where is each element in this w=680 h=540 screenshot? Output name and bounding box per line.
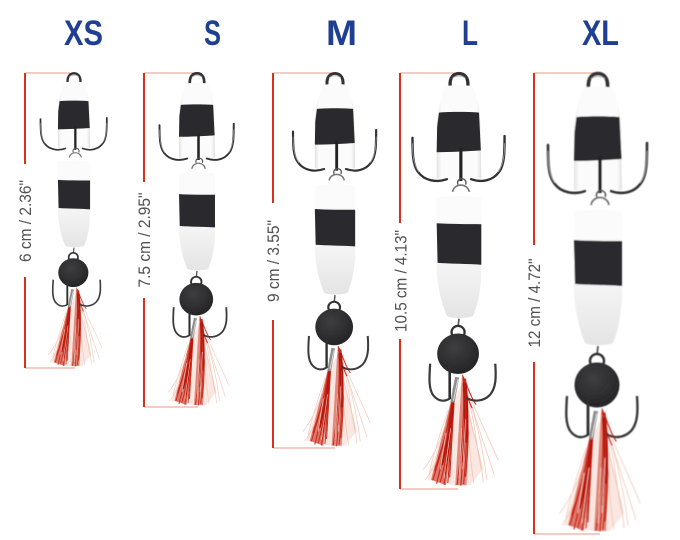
upper float xyxy=(574,86,622,192)
lower float xyxy=(179,172,215,270)
upper treble hook xyxy=(293,130,376,180)
upper float xyxy=(315,84,355,169)
size label: L: L xyxy=(462,14,478,53)
top eyelet xyxy=(68,73,80,83)
ball sinker xyxy=(574,346,620,408)
size label: M: M xyxy=(326,14,357,53)
red feather tail xyxy=(560,409,640,531)
lower float xyxy=(574,210,622,345)
length text XL: 12 cm / 4.72" xyxy=(526,258,544,348)
lure: S xyxy=(160,73,234,405)
upper treble hook xyxy=(160,124,234,169)
lower treble hook xyxy=(308,336,368,371)
length text L: 10.5 cm / 4.13" xyxy=(392,230,410,332)
upper float xyxy=(58,82,90,149)
top eyelet xyxy=(327,73,343,85)
upper treble hook xyxy=(40,118,107,157)
top eyelet xyxy=(588,74,608,88)
lure: L xyxy=(412,73,505,485)
size label: XL: XL xyxy=(582,14,619,53)
dimension: L bracket and length xyxy=(392,73,458,489)
length text M: 9 cm / 3.55" xyxy=(265,220,283,302)
lower float xyxy=(315,184,355,295)
dimension: M bracket and length xyxy=(265,73,335,448)
lower float xyxy=(437,196,481,318)
top eyelet xyxy=(450,73,468,86)
ball sinker xyxy=(58,248,88,287)
lure: M xyxy=(293,73,376,446)
lure: XS xyxy=(40,73,107,366)
red feather tail xyxy=(424,375,498,485)
size label: S: S xyxy=(204,14,221,53)
red feather tail xyxy=(168,317,228,405)
upper treble hook xyxy=(548,143,647,205)
upper treble hook xyxy=(412,136,505,192)
ball sinker xyxy=(315,295,353,345)
upper float xyxy=(179,83,215,159)
dimension: XL bracket and length xyxy=(526,73,600,534)
lower treble hook xyxy=(429,364,496,402)
lure: XL xyxy=(548,74,647,531)
dimension: S bracket and length xyxy=(136,73,198,407)
lower treble hook xyxy=(53,280,100,307)
top eyelet xyxy=(190,73,204,84)
red feather tail xyxy=(49,288,102,366)
lower treble hook xyxy=(173,307,227,338)
ball sinker xyxy=(437,319,479,374)
size label: XS: XS xyxy=(64,14,103,53)
length text S: 7.5 cm / 2.95" xyxy=(136,192,154,288)
dimension: XS bracket and length xyxy=(17,73,75,368)
upper float xyxy=(437,85,481,180)
length text XS: 6 cm / 2.36" xyxy=(17,180,35,262)
ball sinker xyxy=(179,271,213,316)
lower float xyxy=(58,161,90,247)
red feather tail xyxy=(303,347,370,446)
lower treble hook xyxy=(566,396,637,439)
